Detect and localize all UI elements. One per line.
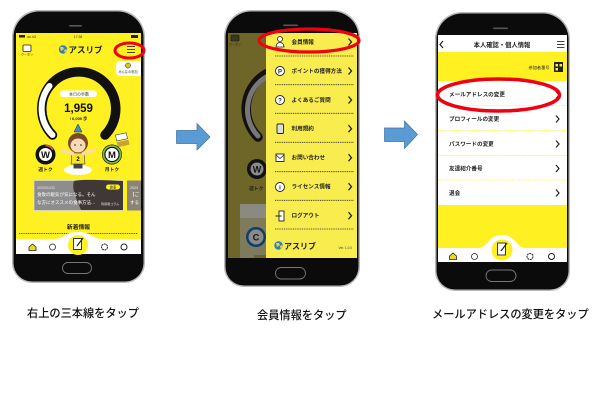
article card partial: 【ご xyxy=(130,191,139,197)
article card xyxy=(34,180,123,210)
step goal: / 6,000 歩 xyxy=(70,115,87,121)
article card partial xyxy=(127,180,141,210)
dimmed home background xyxy=(229,35,268,258)
article card partial: する xyxy=(130,199,139,206)
settings list xyxy=(438,81,567,205)
callout: red ellipse on member info xyxy=(259,29,359,52)
header bar xyxy=(440,40,564,49)
card: everyone's activity: みんなの参加 xyxy=(118,69,138,74)
yellow lower area xyxy=(438,205,567,249)
arrow 1 xyxy=(176,124,210,150)
menu item: license: ライセンス情報 xyxy=(292,183,331,191)
badge: weekly W: 週トク xyxy=(38,166,53,173)
menu logo: アスリブ xyxy=(284,241,316,251)
article card: 食後の眠気が気になる。そん xyxy=(37,191,96,198)
menu item: points: ポイントの獲得方法 xyxy=(292,67,342,75)
side menu panel xyxy=(266,33,357,258)
callout: red ellipse on hamburger xyxy=(115,43,144,58)
badge: monthly M: 月トク xyxy=(105,166,119,173)
bottom navigation xyxy=(438,235,567,262)
dimmed home background: クーポン xyxy=(229,42,241,46)
menu item: points xyxy=(276,66,342,76)
yellow member band: 参加者番号 xyxy=(529,64,550,71)
menu item: terms: 利用規約 xyxy=(292,125,314,133)
badge: weekly W xyxy=(36,144,56,173)
list item: referral: 友達紹介番号 xyxy=(449,164,483,172)
illustration: mascot xyxy=(62,124,94,175)
menu item: contact xyxy=(276,154,325,162)
list item: email: メールアドレスの変更 xyxy=(449,90,505,98)
menu item: logout xyxy=(276,211,319,221)
badge: monthly M: M xyxy=(108,150,116,161)
home button xyxy=(276,268,306,279)
bottom navigation xyxy=(16,232,141,255)
chart: step progress ring xyxy=(42,72,116,135)
menu item: member info: 会員情報 xyxy=(292,38,314,46)
menu item: license xyxy=(276,182,331,192)
menu item: FAQ: ? xyxy=(278,98,282,104)
caption 2: 会員情報をタップ xyxy=(257,308,347,322)
menu item: FAQ: よくあるご質問 xyxy=(292,96,331,104)
step count: 1,959 xyxy=(64,103,93,115)
dimmed home background: W xyxy=(253,164,262,174)
steps label pill: 本日の歩数 xyxy=(69,90,89,96)
article card: 利用者コラム xyxy=(101,201,119,206)
status bar: 17:38 xyxy=(74,35,82,39)
list item: profile: プロフィールの変更 xyxy=(449,115,500,123)
home button xyxy=(486,270,516,282)
article card partial: 2023 xyxy=(130,186,138,190)
list item: withdraw: 退会 xyxy=(449,189,461,197)
badge: monthly M xyxy=(102,144,122,173)
menu logo xyxy=(274,241,316,251)
menu item: member info xyxy=(276,36,314,47)
icon: gift badge xyxy=(115,133,129,147)
icon: coupon: クーポン xyxy=(21,52,33,56)
caption 1: 右上の三本線をタップ xyxy=(27,306,139,320)
caption 3: メールアドレスの変更をタップ xyxy=(432,307,589,321)
version: Ver. 1.0.0 xyxy=(339,246,352,250)
icon: hamburger menu xyxy=(127,46,135,53)
dimmed home background: 週トク xyxy=(249,185,264,192)
callout: red ellipse on email item xyxy=(438,79,560,111)
panel: phone 3 member info screen xyxy=(435,12,570,291)
menu item: logout: ログアウト xyxy=(292,212,319,220)
status bar: au 4G xyxy=(27,35,37,39)
article card: 食事 xyxy=(110,184,117,190)
menu item: points: P xyxy=(278,70,282,76)
status bar xyxy=(19,35,138,39)
menu item: contact: お問い合わせ xyxy=(292,154,325,162)
menu item: terms xyxy=(277,124,314,134)
logo: アスリブ xyxy=(68,45,103,55)
illustration: mascot: 2 xyxy=(76,157,80,163)
panel: phone 2 menu screen xyxy=(224,10,360,287)
card: everyone's activity xyxy=(116,61,141,76)
article card: な方にオススメの食事方法… xyxy=(37,199,96,206)
heading: news: 新着情報 xyxy=(67,223,90,231)
menu item: FAQ xyxy=(276,96,331,104)
badge: weekly W: W xyxy=(41,150,50,161)
arrow 2 xyxy=(384,121,418,148)
header bar: 本人確認・個人情報 xyxy=(474,40,531,49)
home button xyxy=(62,262,92,274)
panel: phone 1 home screen xyxy=(12,10,145,283)
dimmed home background: C xyxy=(253,232,260,242)
article card: 2023/01/31 xyxy=(37,186,55,190)
yellow member band xyxy=(438,52,567,81)
menu item: license: i xyxy=(279,186,281,192)
steps label pill xyxy=(60,90,97,97)
list item: password: パスワードの変更 xyxy=(449,140,494,148)
icon: coupon xyxy=(21,45,33,56)
